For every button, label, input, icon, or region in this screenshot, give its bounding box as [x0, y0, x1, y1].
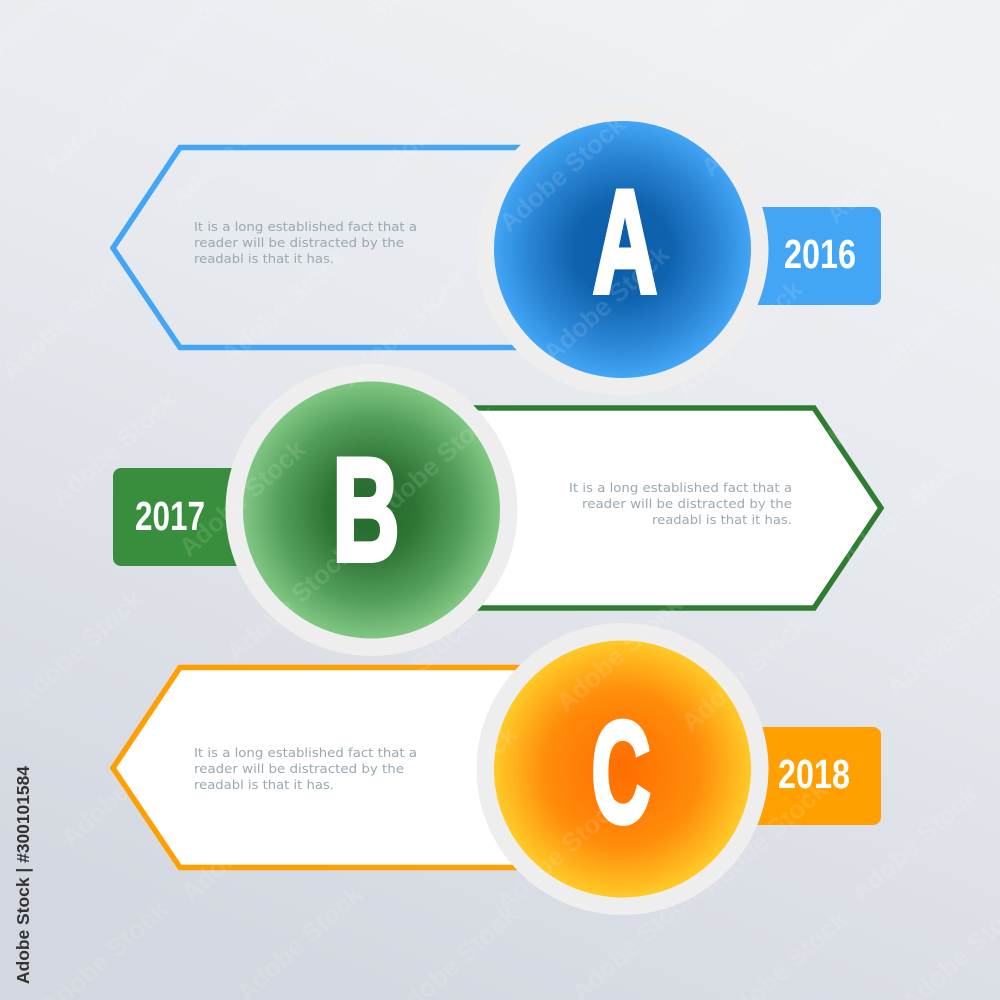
year tab A [700, 207, 881, 305]
panel: C [113, 623, 881, 915]
text block B: readabl is that it has. [652, 513, 792, 528]
watermark pattern: Adobe Stock [537, 239, 675, 368]
year tab A: 2016 [784, 231, 856, 277]
watermark pattern: Adobe Stock [385, 719, 523, 848]
text block A: reader will be distracted by the [194, 236, 404, 251]
badge A [476, 104, 768, 396]
watermark pattern: Adobe Stock [670, 274, 808, 403]
watermark pattern: Adobe Stock [820, 101, 958, 230]
watermark pattern: Adobe Stock [220, 539, 358, 668]
watermark pattern: Adobe Stock [175, 779, 313, 908]
watermark pattern: Adobe Stock [35, 51, 173, 180]
year tab C: 2018 [778, 751, 850, 797]
watermark pattern: Adobe Stock [215, 241, 353, 370]
watermark pattern: Adobe Stock [835, 444, 973, 573]
arrow outline B [400, 408, 881, 608]
badge C [476, 623, 768, 915]
year tab C [700, 727, 881, 825]
watermark pattern: Adobe Stock [340, 609, 478, 738]
text block C: It is a long established fact that a [194, 746, 417, 761]
watermark pattern: Adobe Stock [695, 54, 833, 183]
panel: A [113, 104, 881, 396]
watermark pattern: Adobe Stock [490, 789, 628, 918]
badge C: C [592, 694, 650, 852]
watermark pattern: Adobe Stock [55, 724, 193, 853]
badge B [226, 364, 518, 656]
year tab B [113, 468, 293, 566]
text block B: It is a long established fact that a [569, 481, 792, 496]
watermark pattern: Adobe Stock [505, 434, 643, 563]
text block A: readabl is that it has. [194, 252, 334, 267]
watermark pattern: Adobe Stock [10, 584, 148, 713]
watermark pattern: Adobe Stock [715, 419, 853, 548]
watermark pattern: Adobe Stock [335, 264, 473, 393]
watermark id: Adobe Stock | #300101584 [13, 766, 33, 984]
watermark pattern: Adobe Stock [367, 59, 505, 188]
panel: B [113, 364, 881, 656]
watermark pattern: Adobe Stock [845, 779, 983, 908]
year tab B: 2017 [135, 493, 205, 539]
watermark pattern: Adobe Stock [550, 589, 688, 718]
text block C: reader will be distracted by the [194, 762, 404, 777]
watermark pattern: Adobe Stock [45, 384, 183, 513]
watermark pattern: Adobe Stock [365, 399, 503, 528]
watermark pattern: Adobe Stock [493, 109, 631, 238]
text block A: It is a long established fact that a [194, 220, 417, 235]
arrow outline C [113, 668, 600, 868]
watermark pattern: Adobe Stock [675, 609, 813, 738]
badge A: A [593, 160, 657, 323]
arrow outline A [113, 148, 600, 348]
badge B: B [332, 428, 400, 591]
watermark pattern: Adobe Stock [695, 774, 833, 903]
watermark pattern: Adobe Stock [163, 84, 301, 213]
text block B: reader will be distracted by the [582, 497, 792, 512]
text block C: readabl is that it has. [194, 778, 334, 793]
watermark pattern: Adobe Stock [173, 434, 311, 563]
